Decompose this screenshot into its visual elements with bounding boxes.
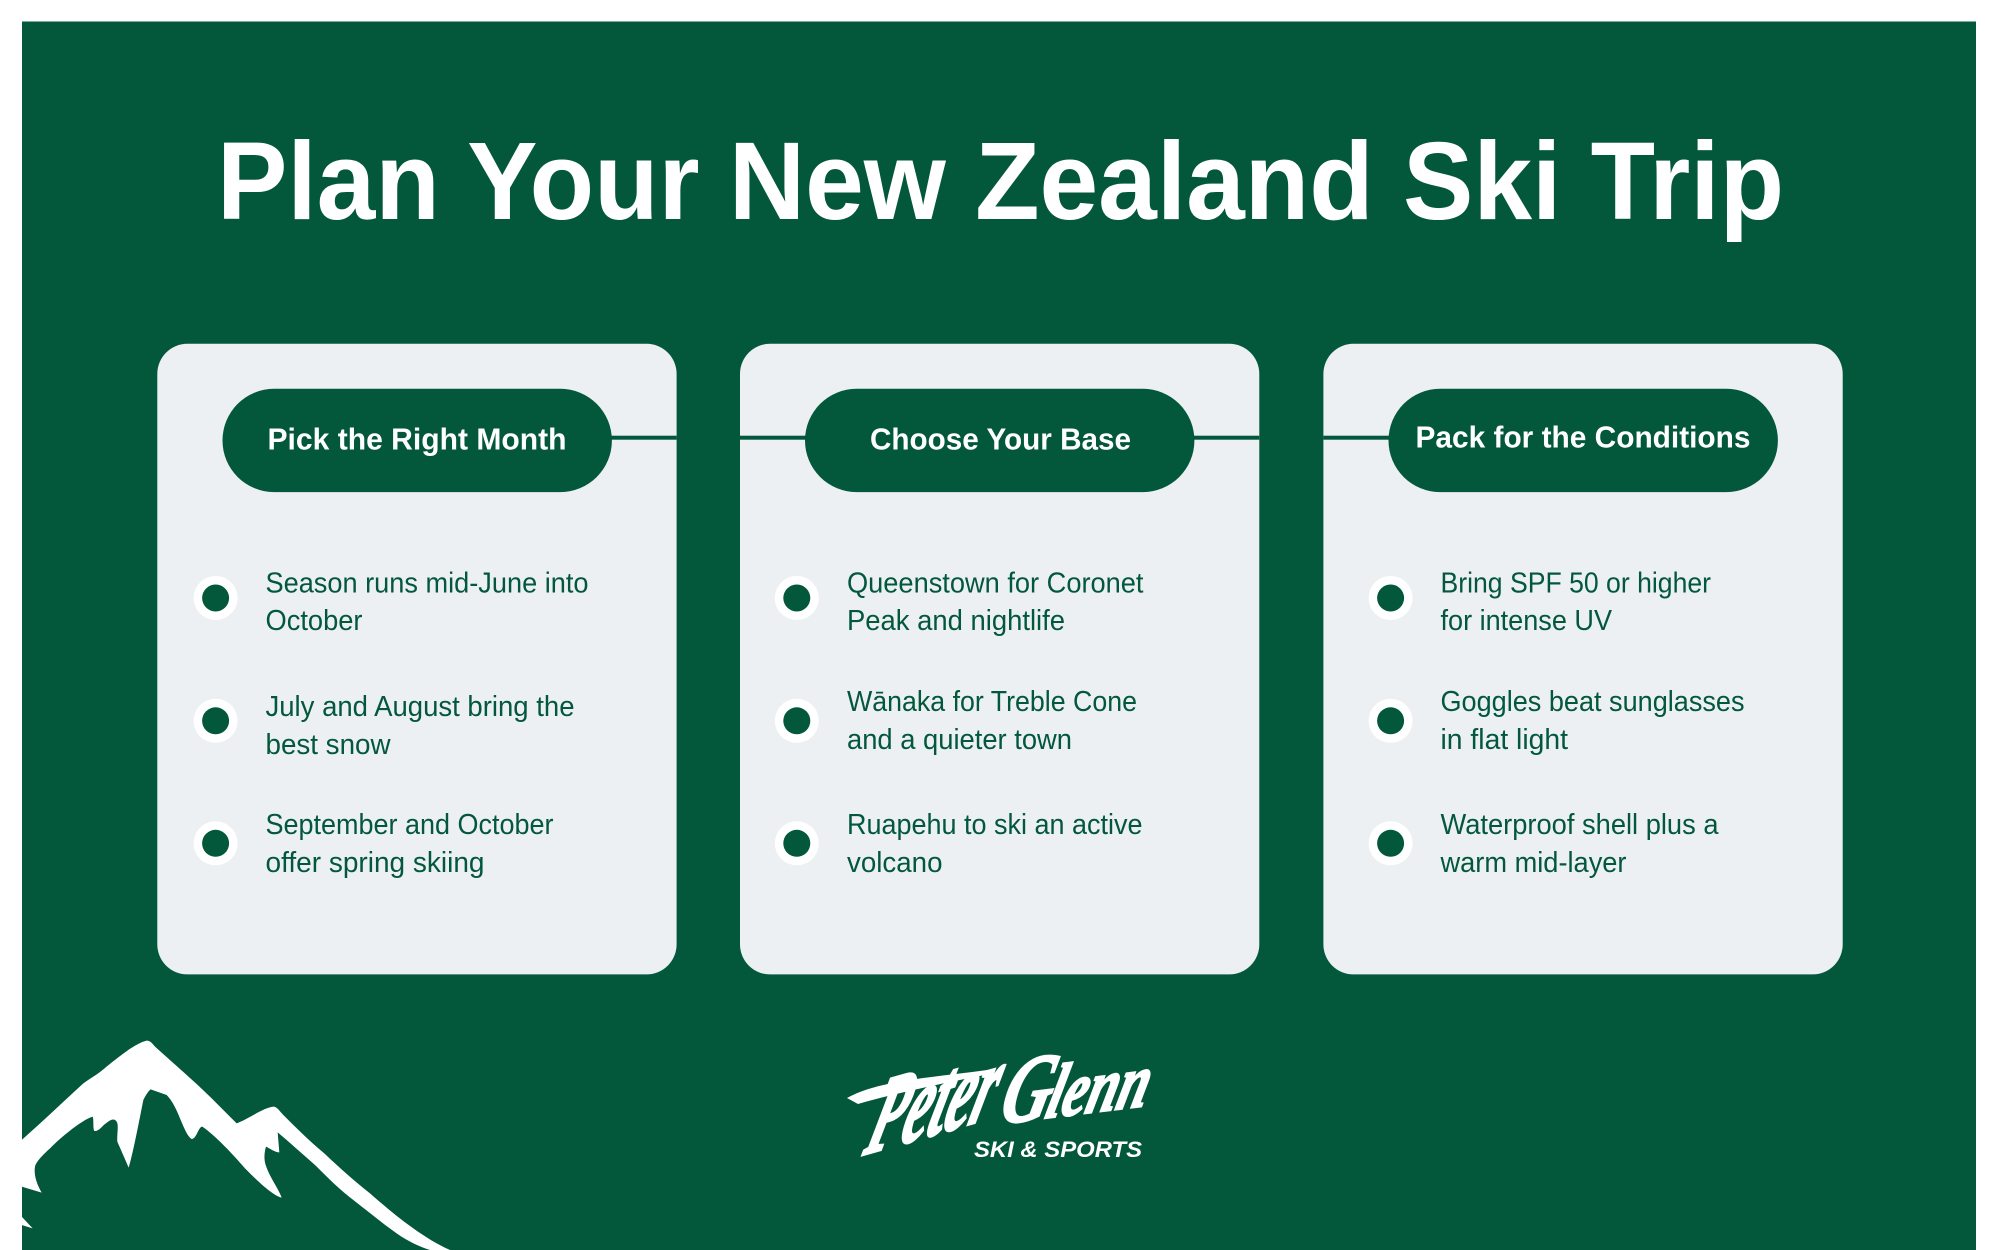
bullet: queenstown: Queenstown for Coronet: [847, 567, 1144, 599]
bullet: ruapehu: volcano: [847, 847, 942, 879]
bullet: ruapehu: [775, 809, 1142, 879]
bullet: queenstown: [775, 567, 1144, 637]
card background: [1323, 344, 1843, 974]
heading pill: Pack for the Conditions: [1416, 420, 1750, 454]
bullet: july and august: [194, 691, 574, 761]
connector line: [1323, 436, 1399, 440]
bullet: spf: for intense UV: [1440, 605, 1613, 637]
connector line: [600, 436, 677, 440]
bullet: september and october: offer spring skiing: [266, 847, 484, 879]
bullet: july and august: July and August bring the: [266, 691, 574, 723]
heading pill: Pick the Right Month: [268, 421, 566, 456]
bullet: spf: Bring SPF 50 or higher: [1440, 567, 1711, 599]
bullet: season: [194, 567, 588, 637]
bullet: waterproof: warm mid-layer: [1440, 847, 1627, 879]
icon: snowy mountain: [22, 1041, 450, 1250]
logo tagline: SKI & SPORTS: [974, 1137, 1142, 1162]
panel: pick the right month: [157, 344, 677, 974]
panel: pack for the conditions: [1323, 344, 1843, 974]
heading pill: [1388, 389, 1778, 492]
heading pill: [222, 389, 612, 492]
bullet: season: October: [266, 605, 363, 637]
card background: [157, 344, 677, 974]
heading pill: Choose Your Base: [870, 421, 1131, 456]
bullet: season: Season runs mid-June into: [266, 567, 588, 599]
bullet: waterproof: Waterproof shell plus a: [1440, 809, 1719, 841]
logo wordmark: Glenn: Glenn: [991, 1019, 1167, 1145]
heading pill: [805, 389, 1194, 492]
bullet: wanaka: [775, 686, 1137, 756]
connector line: [740, 436, 1259, 440]
bullet: september and october: [194, 809, 554, 879]
bullet: queenstown: Peak and nightlife: [847, 605, 1065, 637]
bullet: ruapehu: Ruapehu to ski an active: [847, 809, 1142, 841]
bullet: goggles: [1369, 686, 1744, 756]
bullet: july and august: best snow: [266, 729, 392, 761]
logo: Peter Glenn Ski & Sports: [847, 1018, 1167, 1180]
bullet: waterproof: [1369, 809, 1719, 879]
bullet: goggles: Goggles beat sunglasses: [1440, 686, 1744, 718]
bullet: wanaka: Wānaka for Treble Cone: [847, 686, 1137, 718]
logo crossbar swoosh: [847, 1069, 995, 1104]
bullet: wanaka: and a quieter town: [847, 724, 1072, 756]
bullet: september and october: September and October: [266, 809, 554, 841]
logo wordmark: Peter: Peter: [854, 1018, 1020, 1180]
panel: choose your base: [740, 344, 1259, 974]
bullet: spf: [1369, 567, 1711, 637]
card background: [740, 344, 1259, 974]
title: Plan Your New Zealand Ski Trip: [217, 120, 1784, 243]
bullet: goggles: in flat light: [1440, 724, 1568, 756]
